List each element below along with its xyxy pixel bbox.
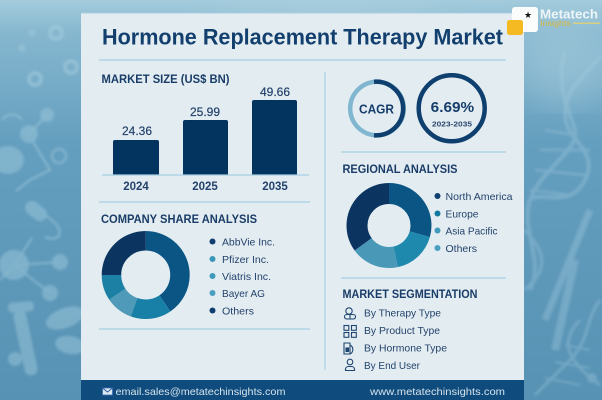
logo: Metatech: [540, 8, 598, 22]
title: Hormone Replacement Therapy Market: [102, 24, 504, 50]
legend: regional: Asia Pacific: [446, 226, 498, 238]
legend: company share: AbbVie Inc.: [222, 236, 275, 248]
panel: market size bar chart: [102, 74, 309, 193]
panel: company share analysis: [101, 214, 275, 318]
legend: company share: Pfizer Inc.: [222, 254, 269, 266]
heading: market segmentation: MARKET SEGMENTATION: [342, 289, 478, 301]
panel: regional analysis: [342, 164, 513, 258]
legend: company share: Others: [222, 306, 254, 318]
logo: [507, 7, 600, 35]
segment labels: By Therapy Type: [364, 308, 441, 320]
CAGR value ring: [419, 75, 485, 141]
icon: therapy type: [344, 308, 356, 319]
bar year labels: 2024: [123, 181, 149, 193]
footer bar: [81, 380, 524, 400]
icon: product type: [344, 326, 356, 337]
bar values: 24.36: [122, 124, 152, 138]
legend: company share: Viatris Inc.: [222, 271, 271, 283]
legend: regional: Europe: [446, 208, 479, 220]
legend: company share: [210, 236, 275, 318]
heading: company share: COMPANY SHARE ANALYSIS: [101, 214, 257, 226]
heading: regional analysis: REGIONAL ANALYSIS: [342, 164, 458, 176]
icon: hormone type: [344, 343, 353, 354]
CAGR ring: [350, 82, 404, 135]
logo: ★: [524, 10, 532, 20]
segment labels: [364, 308, 447, 372]
panel: market segmentation: [342, 289, 478, 372]
bar values: [122, 85, 290, 138]
icon: end user: [346, 359, 354, 370]
CAGR value ring: 2023-2035: [432, 120, 472, 128]
bar values: 49.66: [260, 85, 290, 99]
footer bar: www.metatechinsights.com: [369, 386, 505, 398]
bars: [113, 100, 297, 175]
legend: regional: [434, 191, 513, 255]
heading: market size: MARKET SIZE (US$ BN): [102, 74, 230, 86]
CAGR ring: CAGR: [359, 102, 394, 116]
logo: Insights: [540, 19, 571, 28]
segment labels: By End User: [364, 360, 420, 372]
bar year labels: 2025: [192, 181, 218, 193]
CAGR value ring: 6.69%: [431, 99, 474, 116]
legend: regional: North America: [446, 191, 513, 203]
segment labels: By Hormone Type: [364, 342, 447, 354]
bar year labels: 2035: [262, 181, 288, 193]
donut: regional: [357, 194, 421, 258]
donut: company share: [111, 241, 180, 309]
segment labels: By Product Type: [364, 325, 440, 337]
legend: regional: Others: [446, 243, 477, 255]
footer bar: email.sales@metatechinsights.com: [116, 386, 286, 398]
icon: envelope: [102, 388, 112, 395]
bar year labels: [123, 181, 288, 193]
legend: company share: Bayer AG: [222, 288, 265, 300]
bar values: 25.99: [190, 105, 220, 119]
